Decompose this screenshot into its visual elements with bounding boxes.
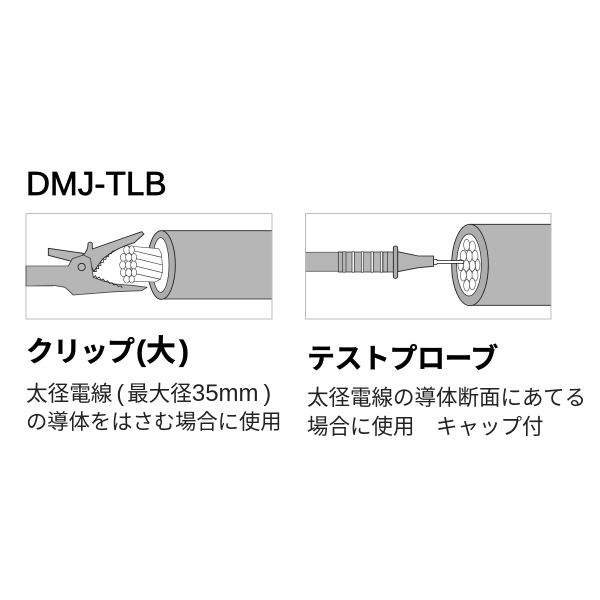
heading: test probe: テストプローブ (307, 342, 498, 374)
jaw serration (93, 276, 122, 288)
back lever (48, 248, 83, 261)
text: probe description: 場合に使用 キャップ付 (307, 414, 544, 438)
text: probe description: 太径電線の導体断面にあてる (307, 386, 586, 410)
cable insulation opening (152, 238, 169, 292)
cable body (470, 224, 551, 305)
pivot (78, 263, 85, 271)
cable end ring (452, 224, 488, 306)
conductor opening (457, 234, 481, 296)
text: probe description (307, 386, 586, 438)
conductor strands (458, 239, 480, 291)
probe lead (306, 252, 338, 271)
probe cone (398, 252, 434, 272)
title: DMJ-TLB (26, 166, 167, 203)
text: clip description: の導体をはさむ場合に使用 (26, 410, 282, 434)
probe grip (338, 252, 393, 272)
illustration: cable with clip (26, 231, 272, 299)
conductor strands (120, 246, 162, 283)
probe needle (434, 259, 464, 264)
handle edges (26, 266, 68, 286)
text: clip description: 太径電線(最大径35mm) (26, 380, 271, 406)
text: clip description (26, 380, 282, 434)
upper jaw (83, 232, 144, 272)
cable body (162, 231, 272, 299)
panel frame: probe (306, 214, 551, 319)
lower jaw and handle (26, 255, 147, 295)
upper serration (94, 251, 115, 272)
cable end ring (147, 231, 175, 299)
panel frame: clip (26, 214, 272, 319)
illustration: cable with probe (306, 224, 551, 306)
probe flange (393, 246, 398, 278)
heading: clip: クリップ(大) (26, 334, 189, 368)
